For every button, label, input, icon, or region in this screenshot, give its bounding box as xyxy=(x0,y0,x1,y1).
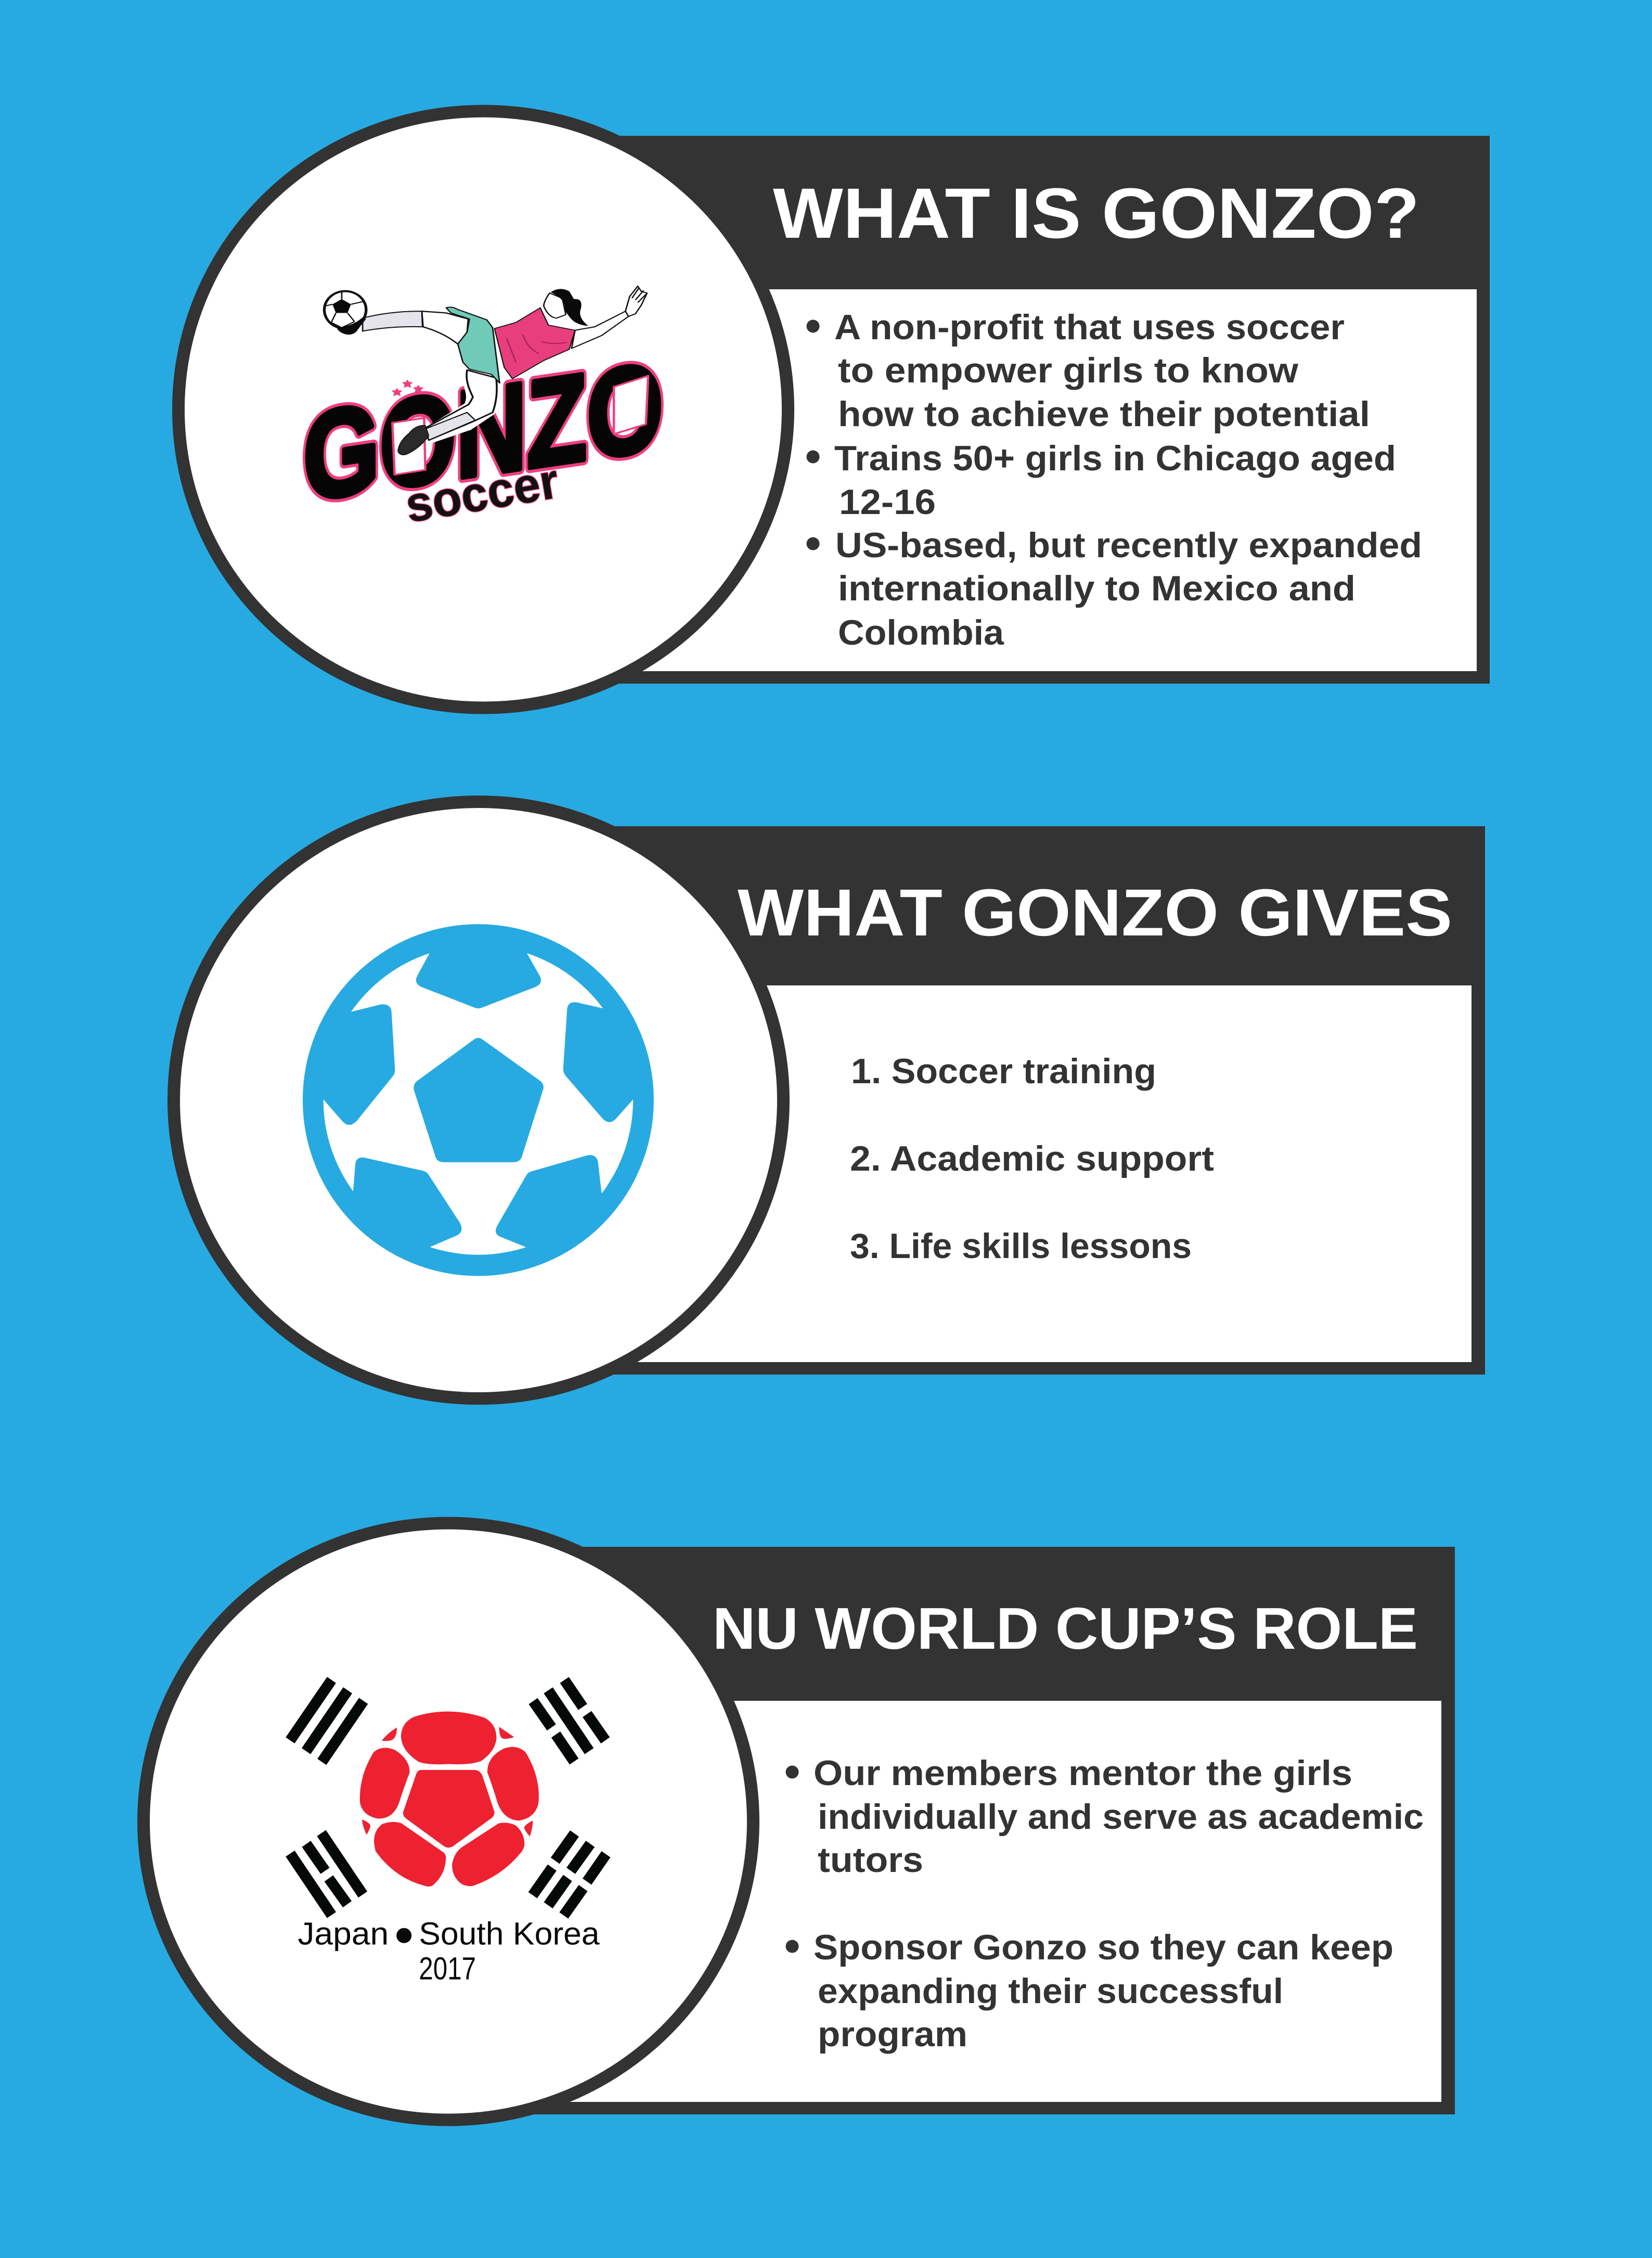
flag trigrams xyxy=(290,1680,606,1916)
icon: gonzo soccer logo xyxy=(303,286,663,533)
heading: nu world cup's role: NU WORLD CUP’S ROLE xyxy=(713,1596,1418,1661)
logo caption xyxy=(298,1916,600,1986)
logo player illustration xyxy=(324,286,647,455)
text block: numbered list xyxy=(850,1051,1214,1266)
heading: what gonzo gives: WHAT GONZO GIVES xyxy=(738,876,1452,950)
icon: blue soccer ball xyxy=(303,924,654,1276)
text block: what is gonzo bullets: how to achieve their potential xyxy=(838,394,1370,434)
logo caption: Japan xyxy=(298,1916,389,1952)
hair xyxy=(551,289,588,326)
text block: what is gonzo bullets xyxy=(806,307,1422,652)
ball xyxy=(324,291,366,328)
extended leg xyxy=(422,311,468,344)
arm xyxy=(572,311,628,349)
logo wordmark: gonzo: GONZO xyxy=(303,336,663,527)
logo caption: South Korea xyxy=(419,1916,600,1952)
text block: role bullets: program xyxy=(818,2015,967,2054)
lower leg with white edge xyxy=(424,370,495,442)
circle: soccer ball background xyxy=(174,802,783,1399)
text block: what is gonzo bullets: Colombia xyxy=(838,613,1004,652)
boot xyxy=(398,426,429,455)
foot on the ball xyxy=(337,317,366,335)
hand xyxy=(625,286,647,316)
heading: what is gonzo: WHAT IS GONZO? xyxy=(773,174,1419,253)
text block: numbered list: 1. Soccer training xyxy=(851,1051,1156,1091)
red ball panels xyxy=(360,1712,539,1887)
text block: numbered list: 3. Life skills lessons xyxy=(850,1226,1192,1266)
text block: numbered list: 2. Academic support xyxy=(850,1139,1214,1178)
circle: gonzo logo background xyxy=(178,111,788,708)
logo wordmark: squared letter counters xyxy=(392,376,648,474)
shirt xyxy=(495,308,575,379)
text block: what is gonzo bullets: Trains 50+ girls in Chicago aged xyxy=(834,439,1396,478)
panel: what gonzo gives xyxy=(557,826,1485,1375)
text block: what is gonzo bullets: US-based, but recently expanded xyxy=(835,525,1422,565)
text block: what is gonzo bullets: internationally to Mexico and xyxy=(838,569,1356,608)
stars xyxy=(391,380,424,396)
text block: role bullets xyxy=(785,1753,1424,2054)
icon: japan south korea 2017 logo xyxy=(290,1680,606,1986)
text block: role bullets: Our members mentor the girls xyxy=(814,1753,1352,1793)
text block: what is gonzo bullets: 12-16 xyxy=(839,482,936,522)
panel: nu world cup's role xyxy=(526,1547,1455,2114)
logo caption: 2017 xyxy=(419,1951,476,1986)
logo wordmark: soccer: soccer xyxy=(402,453,562,533)
text block: role bullets: expanding their successful xyxy=(818,1971,1283,2011)
logo wordmark: gonzo: GONZO xyxy=(303,336,663,527)
circle: world cup logo background xyxy=(144,1523,753,2120)
panel: what is gonzo xyxy=(561,136,1490,684)
text block: role bullets: Sponsor Gonzo so they can keep xyxy=(814,1928,1393,1967)
shorts xyxy=(446,307,500,383)
text block: what is gonzo bullets: to empower girls to know xyxy=(838,351,1299,390)
text block: what is gonzo bullets: A non-profit that uses soccer xyxy=(834,307,1345,347)
text block: role bullets: tutors xyxy=(818,1840,923,1880)
face xyxy=(544,293,566,318)
text block: role bullets: individually and serve as academic xyxy=(818,1797,1424,1837)
